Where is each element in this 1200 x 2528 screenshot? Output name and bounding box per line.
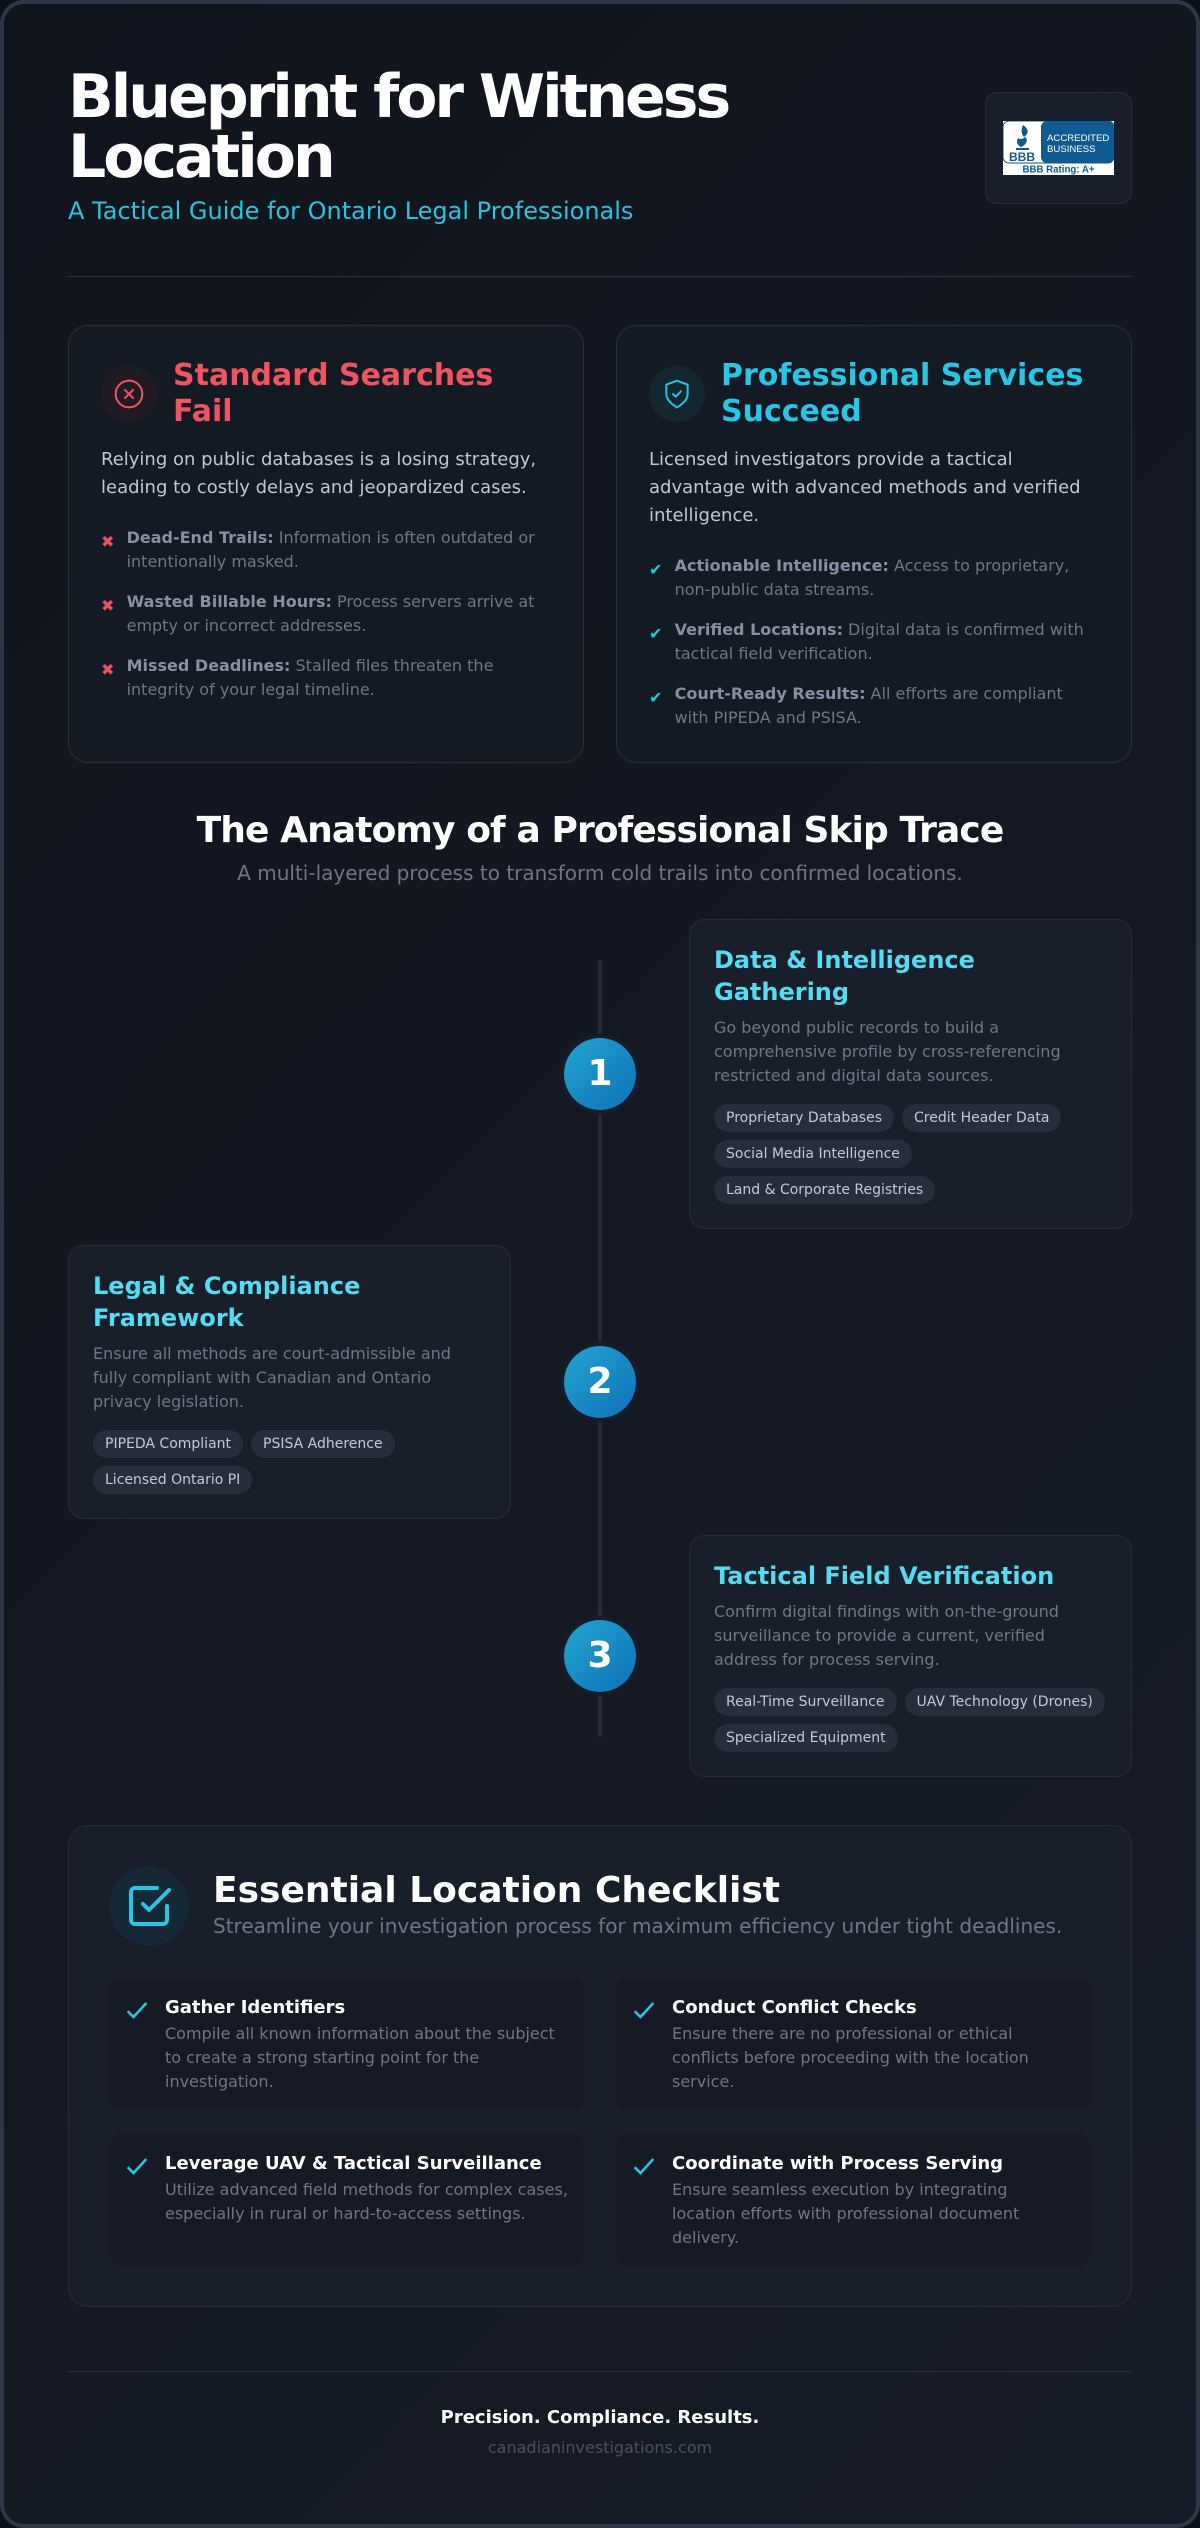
icon: check square	[109, 1866, 189, 1946]
step 1 number: 1	[587, 1053, 613, 1094]
benefit: verified locations: ✔	[649, 624, 662, 643]
BBB accreditation badge: ACCREDITED	[1047, 133, 1109, 144]
step 3 number: 3	[587, 1635, 613, 1676]
item: coordinate with process serving	[616, 2134, 1091, 2266]
step 1 tags: Land & Corporate Registries	[726, 1182, 923, 1198]
step 1 tags	[714, 1104, 1061, 1204]
step 2 tags: PIPEDA Compliant	[105, 1436, 231, 1452]
step 1 card	[689, 919, 1132, 1229]
item: gather identifiers: Gather Identifiers	[165, 1997, 345, 2018]
item: gather identifiers: Compile all known information about the subject to create a strong starting point for the investigation.	[165, 2024, 555, 2091]
step 1 tags: Social Media Intelligence	[726, 1146, 900, 1162]
lead text: Relying on public databases is a losing strategy, leading to costly delays and jeopardized cases.	[101, 449, 536, 498]
failure point: dead-end trails: Dead-End Trails: Information is often outdated or intentionally masked.	[127, 528, 535, 571]
checklist subtitle: Streamline your investigation process for maximum efficiency under tight deadlines.	[213, 1914, 1062, 1938]
item: leverage UAV: Leverage UAV & Tactical Surveillance	[165, 2153, 542, 2174]
step 2 tags: PSISA Adherence	[263, 1436, 383, 1452]
benefit: actionable intelligence: Actionable Intelligence: Access to proprietary, non-public data streams.	[675, 556, 1069, 599]
step 2 card	[68, 1245, 511, 1519]
BBB accreditation badge: BBB	[1009, 150, 1035, 164]
item: leverage UAV	[109, 2134, 584, 2266]
panel: essential location checklist	[68, 1825, 1132, 2307]
step 3 card: Tactical Field Verification	[714, 1562, 1054, 1590]
failure point: wasted hours: ✖	[101, 596, 114, 615]
failure point: missed deadlines: ✖	[101, 660, 114, 679]
benefit: court-ready results: Court-Ready Results: All efforts are compliant with PIPEDA and PSISA.	[675, 684, 1063, 727]
step 1 number	[564, 1038, 636, 1110]
section heading: The Anatomy of a Professional Skip Trace	[197, 810, 1003, 851]
section subtitle: A multi-layered process to transform cold trails into confirmed locations.	[237, 861, 963, 885]
failure point: wasted hours: Wasted Billable Hours: Process servers arrive at empty or incorrect addresses.	[127, 592, 534, 635]
step 1 tags: Credit Header Data	[914, 1110, 1049, 1126]
item: coordinate with process serving: Coordinate with Process Serving	[672, 2153, 1003, 2174]
item: coordinate with process serving: Ensure seamless execution by integrating location efforts with professional document delivery.	[672, 2180, 1019, 2247]
step 3 card	[689, 1535, 1132, 1777]
item: leverage UAV: Utilize advanced field methods for complex cases, especially in rural or hard-to-access settings.	[165, 2180, 568, 2223]
item: conduct conflict checks	[616, 1978, 1091, 2110]
lead text: Licensed investigators provide a tactical advantage with advanced methods and verified intelligence.	[649, 449, 1081, 526]
BBB accreditation badge	[985, 92, 1132, 204]
title: Blueprint for Witness	[68, 62, 728, 132]
panel heading: Standard Searches Fail	[173, 358, 493, 429]
step 3 tags: Real-Time Surveillance	[726, 1694, 885, 1710]
step 3 card: Confirm digital findings with on-the-ground surveillance to provide a current, verified address for process serving.	[714, 1602, 1059, 1669]
benefit: court-ready results: ✔	[649, 688, 662, 707]
step 1 card: Data & Intelligence Gathering	[714, 946, 975, 1006]
step 3 tags: Specialized Equipment	[726, 1730, 886, 1746]
icon: shield check	[649, 366, 705, 422]
item: conduct conflict checks: Conduct Conflict Checks	[672, 1997, 917, 2018]
footer website: canadianinvestigations.com	[488, 2438, 712, 2457]
benefit: actionable intelligence: ✔	[649, 560, 662, 579]
step 3 tags: UAV Technology (Drones)	[917, 1694, 1093, 1710]
step 2 card: Ensure all methods are court-admissible and fully compliant with Canadian and Ontario privacy legislation.	[93, 1344, 451, 1411]
footer tagline: Precision. Compliance. Results.	[441, 2407, 759, 2428]
step 3 tags	[714, 1688, 1105, 1752]
checklist title: Essential Location Checklist	[213, 1870, 780, 1911]
step 2 card: Legal & Compliance Framework	[93, 1272, 360, 1332]
panel: standard searches fail	[68, 325, 584, 763]
item: gather identifiers	[109, 1978, 584, 2110]
failure point: missed deadlines: Missed Deadlines: Stalled files threaten the integrity of your legal timeline.	[127, 656, 493, 699]
icon: x circle	[101, 366, 157, 422]
subtitle: A Tactical Guide for Ontario Legal Professionals	[68, 197, 633, 225]
step 2 tags: Licensed Ontario PI	[105, 1472, 240, 1488]
step 2 number: 2	[587, 1361, 613, 1402]
timeline line	[598, 960, 602, 1737]
item: conduct conflict checks: Ensure there are no professional or ethical conflicts before proceeding with the location service.	[672, 2024, 1029, 2091]
step 3 number	[564, 1620, 636, 1692]
title: Location	[68, 122, 333, 192]
step 1 card: Go beyond public records to build a comprehensive profile by cross-referencing restricted and digital data sources.	[714, 1018, 1061, 1085]
panel heading: Professional Services Succeed	[721, 358, 1083, 429]
panel: professional services succeed	[616, 325, 1132, 763]
BBB accreditation badge: BUSINESS	[1047, 144, 1096, 155]
failure point: dead-end trails: ✖	[101, 532, 114, 551]
benefit: verified locations: Verified Locations: Digital data is confirmed with tactical field verification.	[675, 620, 1084, 663]
step 2 number	[564, 1346, 636, 1418]
step 1 tags: Proprietary Databases	[726, 1110, 882, 1126]
title	[68, 62, 728, 192]
step 2 tags	[93, 1430, 395, 1494]
